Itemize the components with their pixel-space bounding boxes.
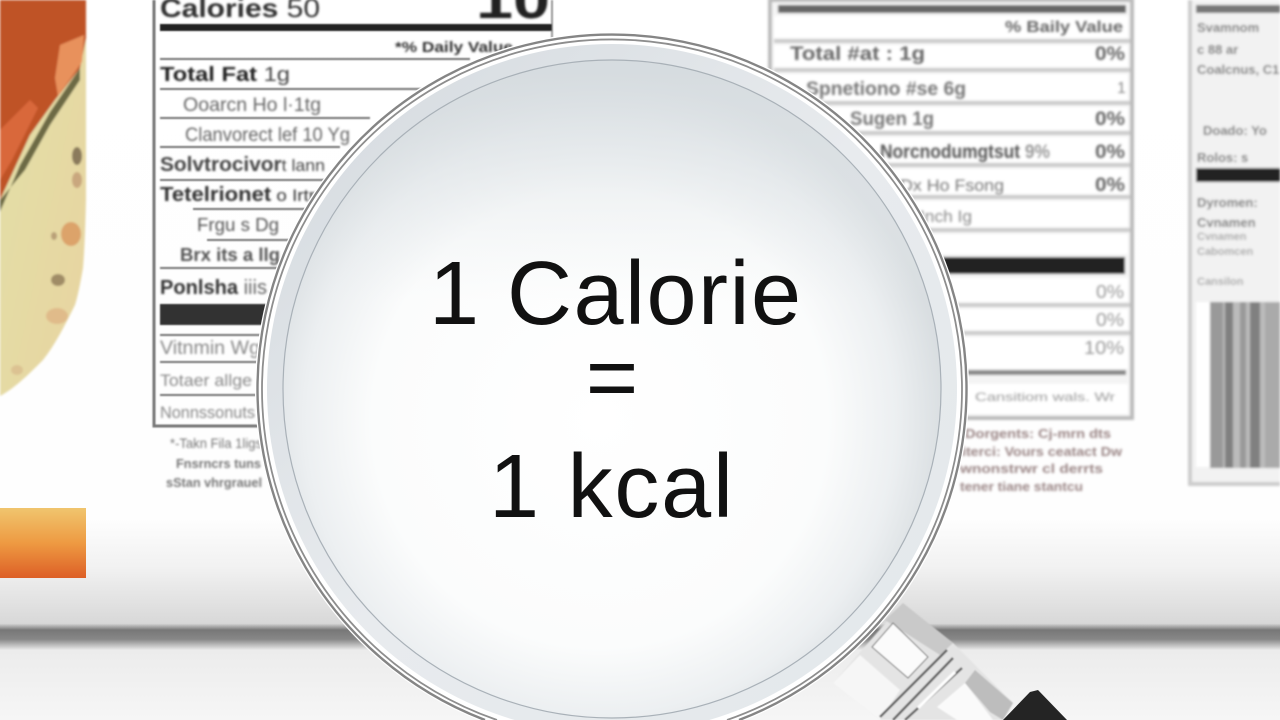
reddish footnote text: Dorgents: Cj-mrn dts [965, 426, 1111, 441]
left label text: Totaer allge [160, 371, 252, 390]
reddish footnote text: iterci: Vours ceatact Dw [962, 444, 1123, 459]
left label text: Nonnssonuts [160, 403, 255, 422]
orange swatch [0, 508, 86, 578]
right label text: Norcnodumgtsut 9% [880, 142, 1050, 163]
right label text: 0% [1095, 44, 1125, 65]
line: 1 Calorie: 1 Calorie [429, 244, 801, 344]
right label text: 0% [1095, 142, 1125, 163]
lens band [267, 44, 957, 720]
right label text: 1 [1117, 80, 1126, 97]
far right label with barcode: Svamnom [1197, 20, 1259, 35]
lens rim [255, 32, 969, 720]
right label text: 10% [1084, 338, 1124, 358]
reddish footnote text: tener tiane stantcu [960, 479, 1083, 494]
right label text [790, 19, 1126, 404]
left label text: Tetelrionet o Irtr [160, 184, 315, 206]
left label text: Brx its a llg [180, 245, 280, 265]
far right label with barcode: c 88 ar [1197, 42, 1238, 57]
far right label with barcode: Cvnamen [1197, 215, 1256, 230]
lens equation text [429, 244, 801, 537]
left label text: Frgu s Dg [197, 215, 279, 235]
left label text: *% Daily Value [395, 39, 513, 56]
left label text: sStan vhrgrauel [166, 475, 262, 490]
far right label with barcode: Doado: Yo [1203, 123, 1267, 138]
right label text: 0% [1096, 282, 1124, 302]
right label text: Cansitiom wals. Wr [975, 390, 1115, 404]
handle grip [1003, 690, 1067, 720]
left label text [160, 0, 550, 490]
left label text: Ooarcn Ho l·1tg [183, 95, 321, 116]
left label text: Vitnmin Wg [160, 338, 260, 359]
nutrition label right [770, 0, 1132, 494]
far right label with barcode: Dyromen: [1197, 195, 1258, 210]
left label text: Total Fat 1g [160, 64, 290, 86]
far right label with barcode: Coalcnus, C1 [1197, 62, 1279, 77]
right label text: Dx Ho Fsong [900, 176, 1004, 195]
right label text: Spnetiono #se 6g [806, 79, 966, 100]
line: 1 kcal: 1 kcal [489, 437, 733, 537]
right label text: 0% [1096, 310, 1124, 330]
far right label with barcode: Cansilon [1197, 276, 1244, 288]
right label text: Total #at : 1g [790, 44, 925, 65]
magnifying glass handle [833, 603, 1067, 720]
right label text: 0% [1095, 175, 1125, 196]
reddish footnote text: wnonstrwr cl derrts [959, 461, 1103, 476]
nutrition label left [154, 0, 552, 490]
left label text: Fnsrncrs tuns [176, 456, 261, 471]
right label text: 0% [1095, 109, 1125, 130]
food photo fragment [0, 0, 86, 396]
equals sign: = [586, 328, 638, 428]
right label text: Inch Ig [920, 207, 972, 226]
right label text: % Baily Value [1005, 19, 1123, 36]
left label text: *-Takn Fila 1ligs [170, 435, 262, 451]
far right label with barcode: Cvnamen [1197, 231, 1247, 243]
lens glass [283, 60, 941, 718]
reddish footnote text [959, 426, 1123, 494]
left label text: Clanvorect lef 10 Yg [185, 125, 350, 146]
right label text: Sugen 1g [850, 109, 934, 130]
far right label with barcode: Cabomcen [1197, 246, 1254, 258]
left label text: Ponlsha iiis [160, 277, 267, 299]
left label text: Solvtrocivor t lann [160, 154, 325, 176]
far right label with barcode: Rolos: s [1197, 150, 1248, 165]
far right label with barcode [1190, 0, 1280, 484]
